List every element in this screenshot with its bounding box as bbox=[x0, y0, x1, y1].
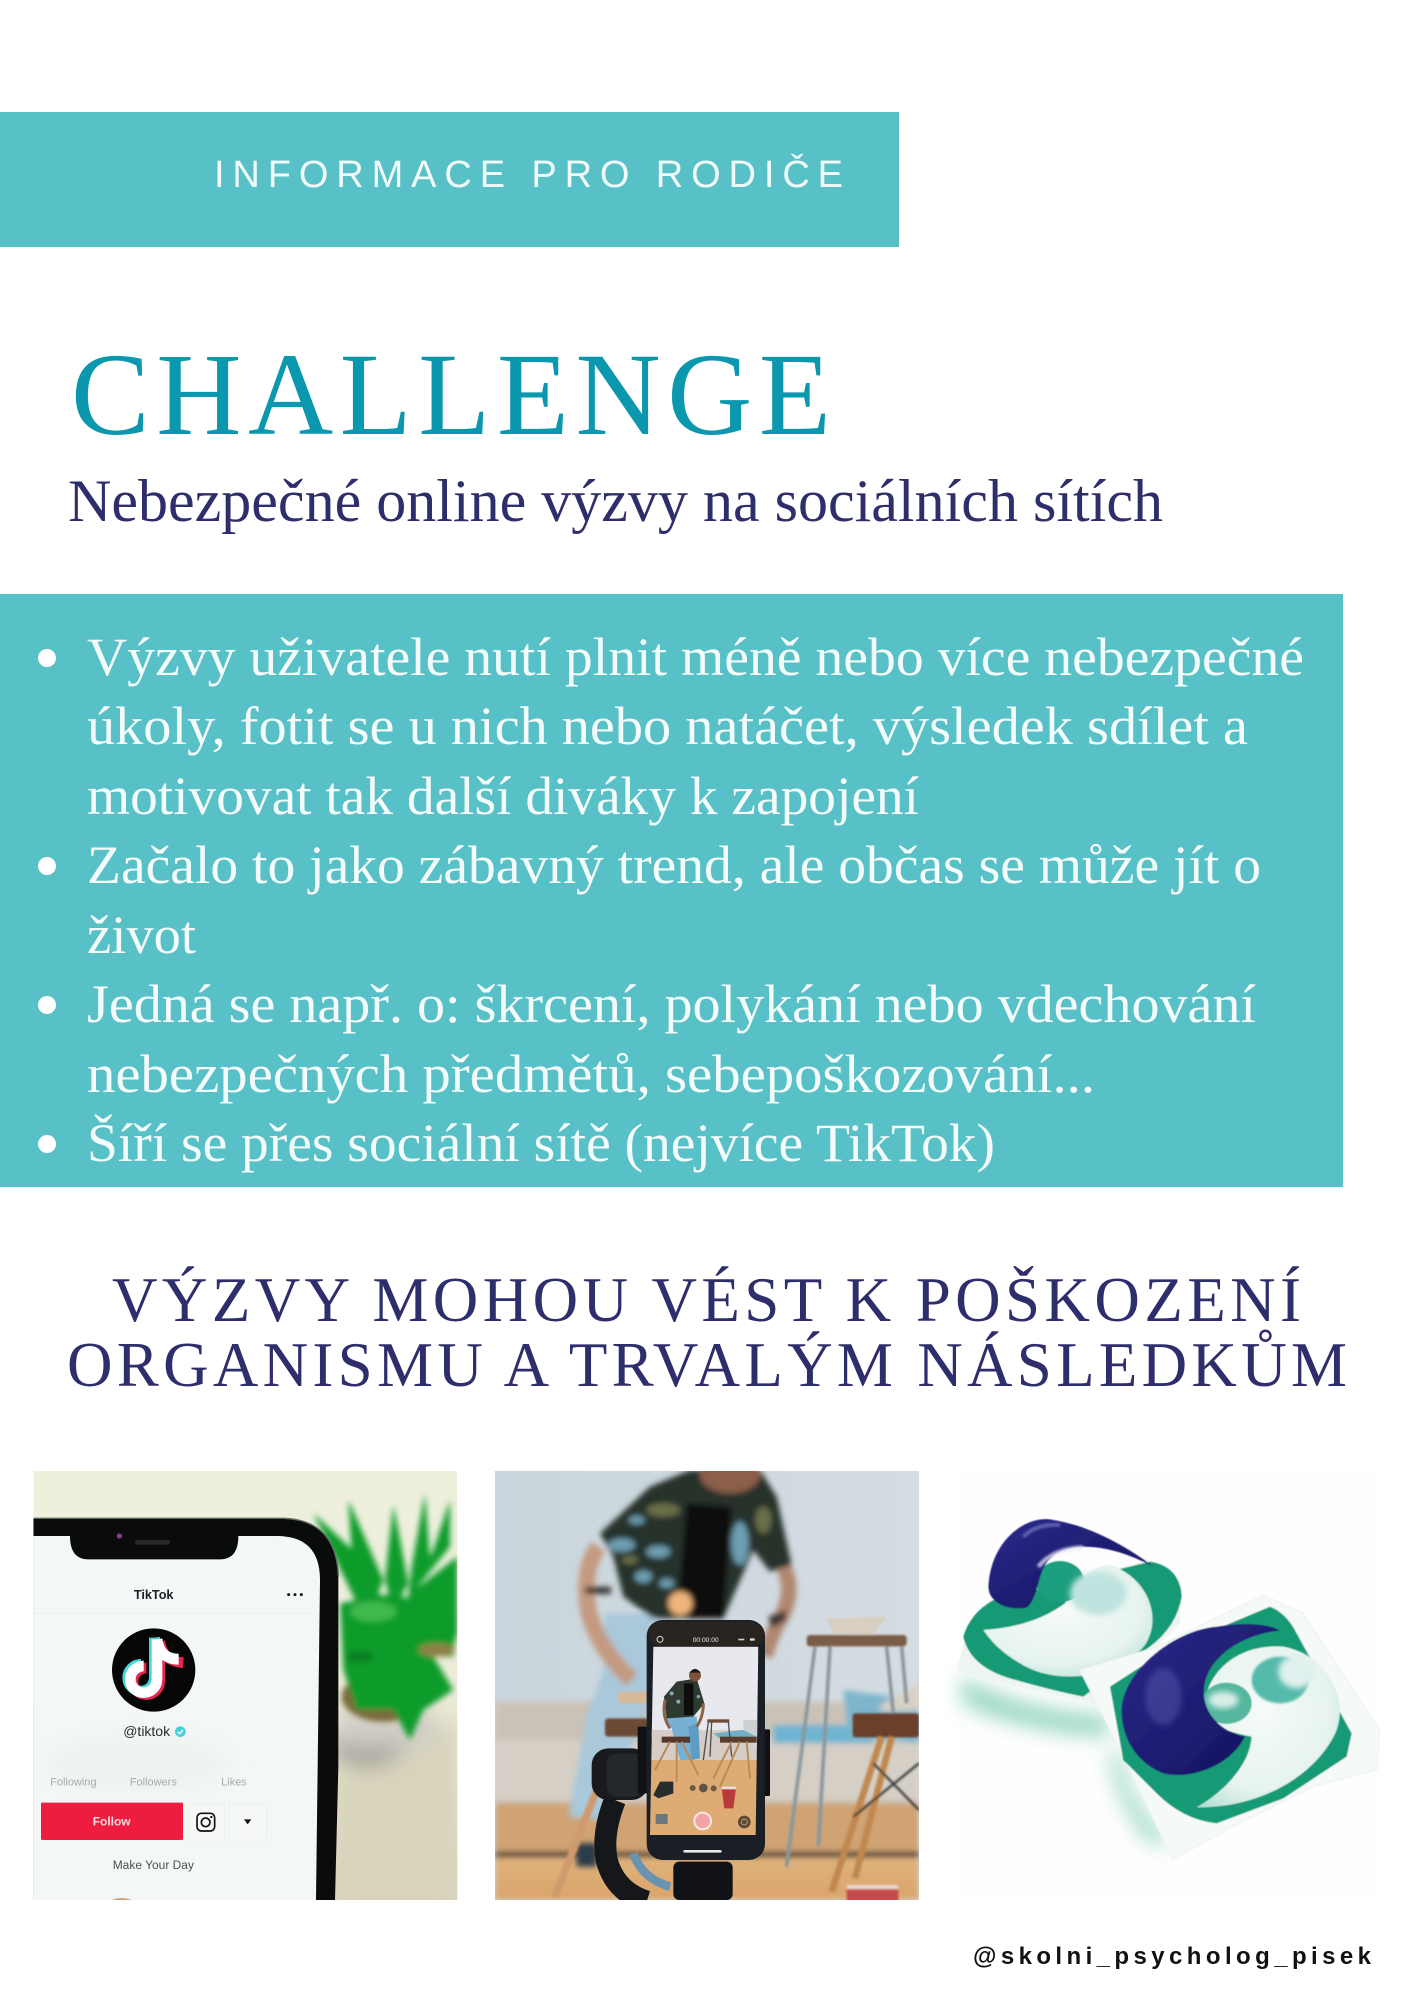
stats labels bbox=[51, 1778, 246, 1788]
stats labels: Followers bbox=[130, 1776, 177, 1788]
bullet text lines: Šíří se přes sociální sítě (nejvíce TikTok) bbox=[87, 1113, 995, 1173]
phone screen scene bbox=[647, 1647, 760, 1837]
phone screen bbox=[33, 1536, 320, 1900]
bullet text lines: nebezpečných předmětů, sebepoškozování... bbox=[87, 1044, 1095, 1104]
heading: consequences warning: ORGANISMU A TRVALÝM NÁSLEDKŮM bbox=[67, 1329, 1347, 1400]
subtitle: Nebezpečné online výzvy na sociálních sítích bbox=[68, 468, 1163, 534]
bullet text lines bbox=[87, 627, 1304, 1173]
photo: phone with tiktok profile bbox=[33, 1470, 457, 1913]
gimbal stabilizer bbox=[592, 1727, 770, 1902]
banner label: INFORMACE PRO RODIČE bbox=[214, 152, 843, 196]
soft green shadows bbox=[960, 1677, 1170, 1843]
blurred room background bbox=[495, 1683, 919, 1900]
heading: consequences warning: VÝZVY MOHOU VÉST K POŠKOZENÍ bbox=[112, 1265, 1301, 1335]
back pod bbox=[957, 1519, 1182, 1703]
profile bio: Make Your Day bbox=[113, 1858, 194, 1872]
icon: instagram button bbox=[188, 1803, 224, 1840]
follow button bbox=[41, 1803, 183, 1840]
blurred person bbox=[568, 1457, 792, 1867]
background surface and shadow bbox=[330, 1710, 457, 1900]
follow button: Follow bbox=[93, 1815, 131, 1829]
bullet text lines: Výzvy uživatele nutí plnit méně nebo více nebezpečné bbox=[87, 627, 1304, 687]
recording timer: 00:00:00 bbox=[693, 1637, 719, 1644]
bullet text lines: motivovat tak další diváky k zapojení bbox=[87, 766, 919, 826]
bullet text lines: úkoly, fotit se u nich nebo natáčet, výsledek sdílet a bbox=[87, 696, 1248, 756]
title: challenge: CHALLENGE bbox=[71, 329, 831, 460]
profile handle: @tiktok bbox=[123, 1723, 171, 1739]
photo: laundry detergent pods bbox=[956, 1470, 1380, 1893]
phone on gimbal bbox=[647, 1620, 765, 1860]
stats labels: Following bbox=[50, 1776, 97, 1788]
photo: person filmed on a phone gimbal bbox=[495, 1457, 919, 1902]
footer handle: @skolni_psycholog_pisek bbox=[973, 1943, 1372, 1970]
bullet markers bbox=[38, 649, 56, 1153]
front pod bbox=[1079, 1595, 1380, 1860]
bullet text lines: život bbox=[87, 905, 196, 965]
heading: consequences warning bbox=[67, 1265, 1347, 1400]
banner: informace pro rodiče bbox=[0, 112, 899, 247]
blurred plant bbox=[313, 1493, 457, 1740]
panel: bullet list about challenges bbox=[0, 594, 1343, 1187]
blurred stools bbox=[555, 1617, 919, 1902]
icon: tiktok logo bbox=[112, 1628, 195, 1712]
dropdown button bbox=[229, 1803, 267, 1840]
phone body bbox=[33, 1518, 338, 1900]
stats labels: Likes bbox=[221, 1777, 247, 1789]
bullet text lines: Jedná se např. o: škrcení, polykání nebo vdechování bbox=[87, 974, 1256, 1034]
app header: TikTok bbox=[134, 1588, 174, 1602]
bullet text lines: Začalo to jako zábavný trend, ale občas se může jít o bbox=[87, 835, 1261, 895]
